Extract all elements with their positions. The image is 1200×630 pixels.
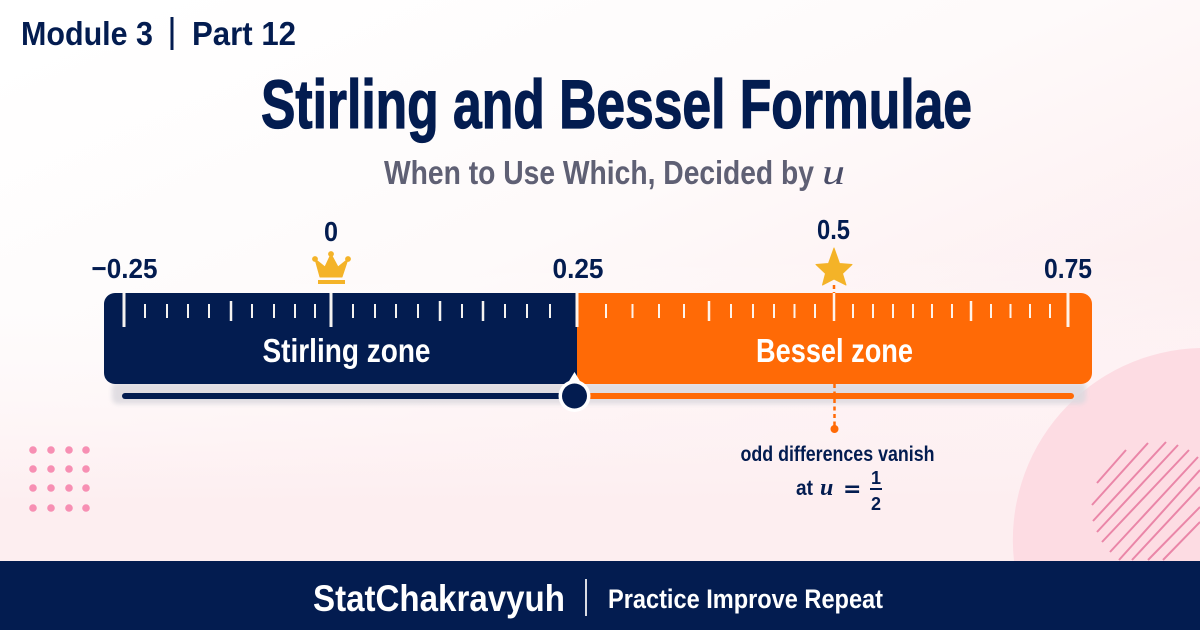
ruler: Stirling zone: [104, 293, 577, 384]
axis labels: 0.25: [552, 253, 604, 284]
decorative pink circle with hatching: [1013, 348, 1200, 561]
callout: =: [843, 477, 861, 502]
dotted leader: [830, 285, 838, 433]
module tag: Part 12: [192, 15, 296, 52]
axis labels: 0: [324, 216, 338, 247]
Bessel label: Bessel zone: [756, 332, 913, 369]
shadow strip under the ruler: [112, 382, 1086, 404]
module tag: [21, 15, 296, 52]
callout: u: [820, 475, 833, 501]
icon: star: [816, 248, 852, 285]
callout: 2: [871, 494, 881, 514]
brand name: StatChakravyuh: [313, 578, 565, 619]
footer divider: [585, 579, 587, 616]
callout: at: [796, 477, 813, 500]
axis labels: 0.75: [1044, 253, 1092, 284]
axis labels: [92, 214, 1092, 284]
callout: odd differences vanish: [740, 443, 934, 466]
axis labels: 0.5: [817, 214, 850, 245]
Bessel ticks: [577, 293, 1068, 327]
callout: 1: [871, 468, 881, 488]
icon: crown: [312, 251, 351, 284]
slider track: [122, 393, 1074, 399]
subtitle: u: [822, 152, 845, 192]
callout: [740, 443, 934, 514]
decorative dot grid: [29, 446, 90, 512]
module tag: Module 3: [21, 15, 153, 52]
ruler: Bessel zone: [577, 293, 1092, 384]
footer band: [0, 561, 1200, 630]
Stirling label: Stirling zone: [262, 332, 430, 369]
tagline: Practice Improve Repeat: [608, 584, 883, 614]
subtitle: When to Use Which, Decided by: [384, 154, 815, 191]
Stirling ticks: [124, 293, 550, 327]
axis labels: −0.25: [92, 253, 158, 284]
slider knob: [558, 372, 590, 412]
title: Stirling and Bessel Formulae: [261, 66, 972, 143]
